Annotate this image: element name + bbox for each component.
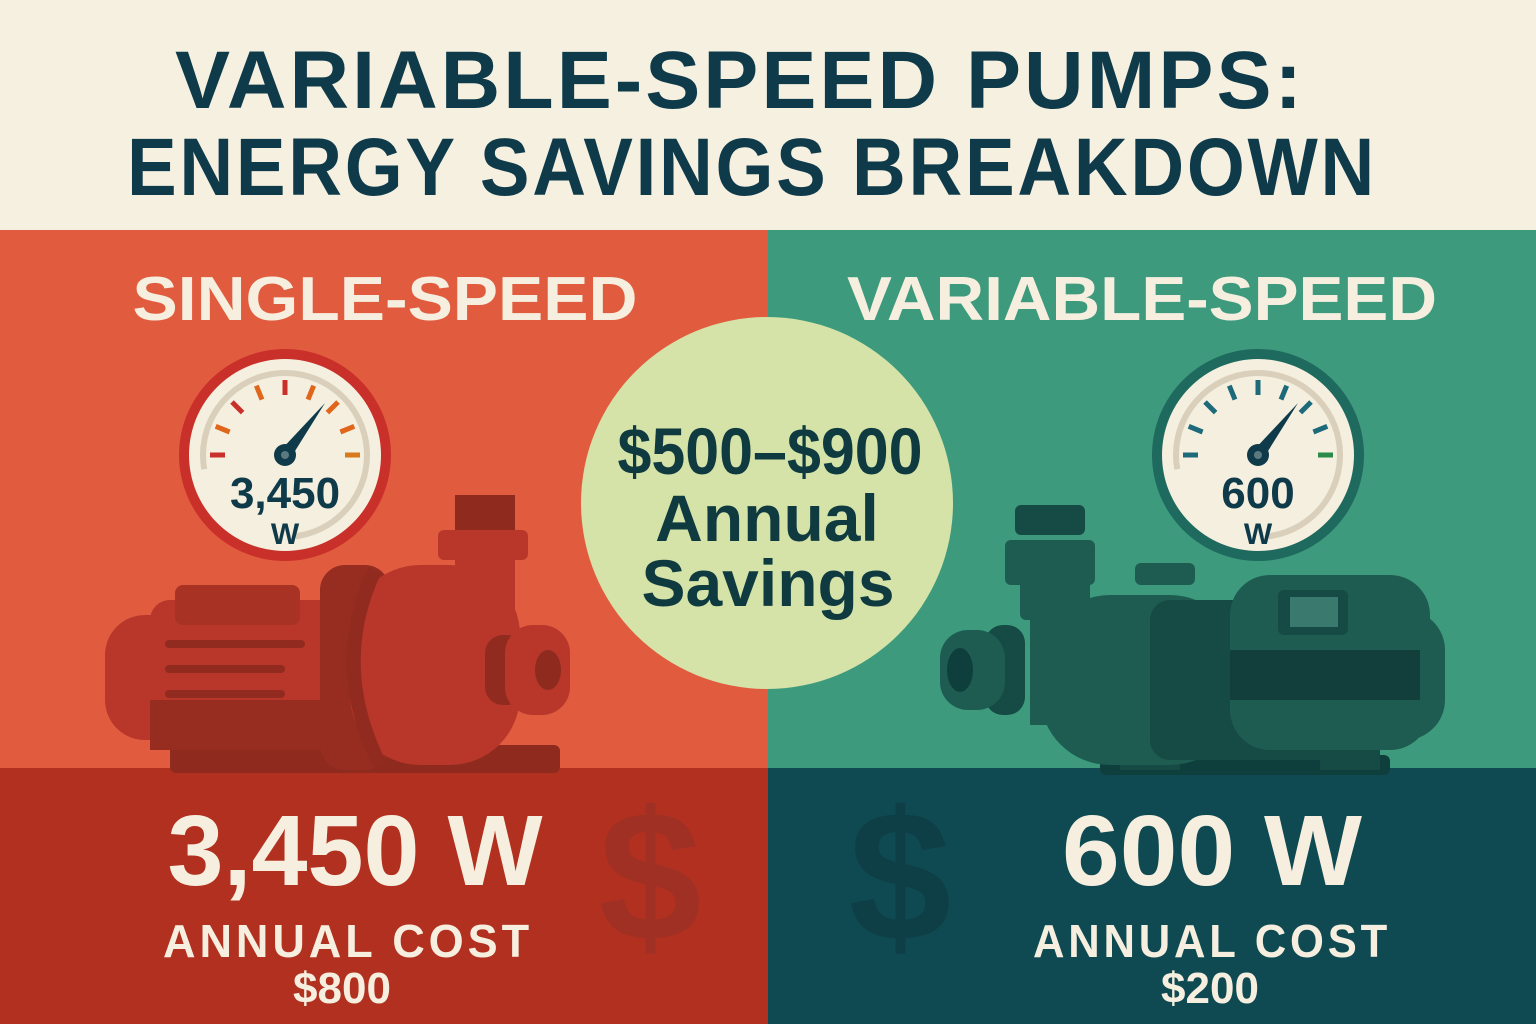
heading: variable-speed: VARIABLE-SPEED [847,265,1437,334]
text: variable-speed wattage: 600 W [1062,795,1363,907]
icon: gauge single-speed: W [271,518,300,551]
icon: single-speed pump [105,495,570,773]
callout: annual savings circle: Savings [641,546,895,620]
icon: gauge variable-speed: 600 [1221,469,1295,518]
callout: annual savings circle: $500–$900 [618,414,922,488]
title: ENERGY SAVINGS BREAKDOWN [127,122,1377,213]
text: single-speed cost: ANNUAL COST [163,915,533,967]
title [127,35,1377,213]
icon: gauge variable-speed: W [1244,518,1273,551]
callout: annual savings circle [581,317,953,689]
icon: gauge single-speed [179,349,391,561]
text: single-speed cost: $800 [293,964,391,1013]
icon: gauge single-speed: 3,450 [230,469,340,518]
icon: variable-speed pump [940,505,1445,775]
icon: dollar sign left: $ [599,774,701,980]
panel: single-speed [0,230,768,1024]
text: variable-speed cost: $200 [1161,964,1259,1013]
title: VARIABLE-SPEED PUMPS: [175,35,1305,126]
icon: dollar sign right: $ [849,774,951,980]
icon: gauge variable-speed [1152,349,1364,561]
panel: variable-speed [768,230,1536,1024]
text: variable-speed cost: ANNUAL COST [1033,915,1391,967]
text: variable-speed cost [1033,915,1391,1013]
text: single-speed wattage: 3,450 W [168,795,543,907]
header band [0,0,1536,230]
heading: single-speed: SINGLE-SPEED [132,265,638,334]
callout: annual savings circle: Annual [655,481,879,555]
text: single-speed cost [163,915,533,1013]
